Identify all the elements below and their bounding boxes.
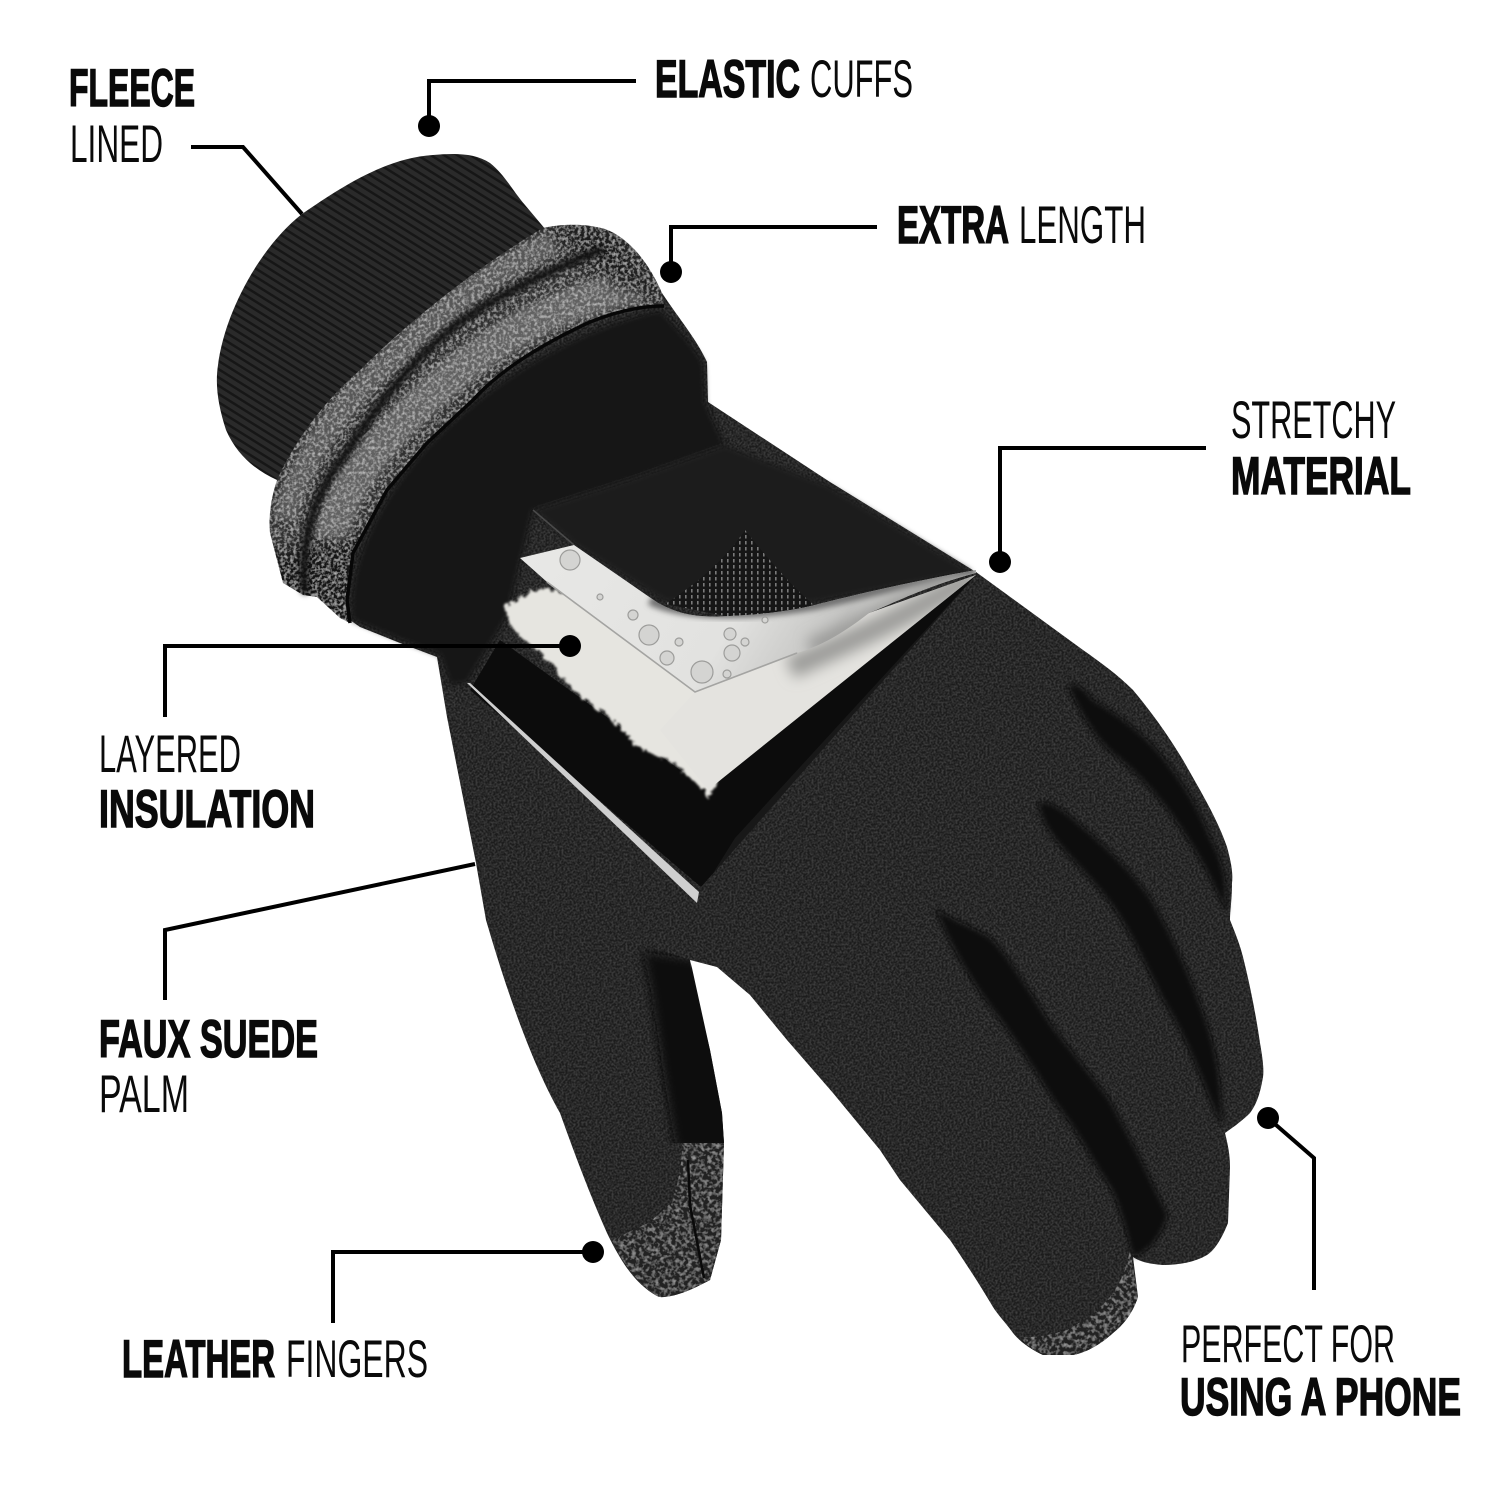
- glove: [217, 154, 1263, 1355]
- little finger shadow: [1068, 684, 1227, 913]
- label: stretchy material: MATERIAL: [1231, 447, 1411, 506]
- index fingertip leather: [1020, 1250, 1138, 1355]
- label: layered insulation: [99, 725, 315, 839]
- black inner layer: [470, 575, 976, 887]
- thumb leather fingertip: [612, 1143, 724, 1297]
- callout: leather fingers: [122, 1241, 604, 1389]
- white sliver: [467, 683, 699, 903]
- black layer outer stripe: [712, 575, 976, 875]
- sheet lower edge: [547, 582, 797, 692]
- glove body: [317, 293, 1263, 1355]
- leader line with dot: [989, 448, 1206, 573]
- inner ridge highlight: [330, 285, 640, 540]
- callout: extra length: [660, 196, 1146, 283]
- leather trim band: [269, 224, 664, 622]
- outer ridge highlight: [285, 243, 555, 520]
- water droplets: [560, 550, 768, 683]
- label: faux suede palm: [99, 1010, 318, 1124]
- label: extra length: LENGTH: [1019, 196, 1146, 255]
- layered insulation cutaway: [467, 445, 976, 903]
- label: perfect for using a phone: [1180, 1315, 1461, 1427]
- leader line with dot: [1257, 1107, 1314, 1290]
- thumb side shadow: [640, 948, 724, 1143]
- flap edge: [533, 510, 574, 545]
- label: stretchy material: [1231, 391, 1411, 506]
- touchscreen mesh layer: [665, 530, 815, 618]
- label: layered insulation: LAYERED: [99, 725, 241, 784]
- leader line: [165, 864, 475, 1000]
- label: fleece lined: [69, 59, 195, 174]
- label: fleece lined: LINED: [70, 115, 163, 174]
- callout: perfect for using a phone: [1180, 1107, 1461, 1427]
- fleece fold shadow: [790, 575, 976, 668]
- middle finger gap shadow: [935, 908, 1168, 1257]
- label: extra length: EXTRA: [897, 196, 1009, 255]
- callout: fleece lined: [69, 59, 302, 214]
- fleece insulation: [505, 575, 976, 797]
- leather band crease: [304, 250, 600, 590]
- band right shadow: [545, 225, 665, 295]
- label: faux suede palm: FAUX SUEDE: [99, 1010, 318, 1069]
- leader line with dot: [333, 1241, 604, 1323]
- label: layered insulation: INSULATION: [99, 780, 315, 839]
- dark wrist panel: [351, 310, 725, 685]
- callout: faux suede palm: [99, 864, 475, 1124]
- smooth fleece face: [660, 575, 976, 790]
- leader line with dot: [165, 635, 581, 717]
- ring finger gap shadow: [1038, 802, 1222, 1125]
- waterproof white sheet: [520, 545, 976, 692]
- thumb leather seam: [688, 1160, 704, 1278]
- fuzzy fleece: [505, 587, 735, 797]
- label: faux suede palm: PALM: [99, 1065, 189, 1124]
- label: leather fingers: FINGERS: [286, 1330, 428, 1389]
- callout: stretchy material: [989, 391, 1411, 573]
- band lower shadow: [274, 530, 361, 622]
- leader line: [191, 147, 302, 214]
- label: fleece lined: FLEECE: [69, 59, 195, 118]
- callout: elastic cuffs: [418, 50, 913, 137]
- knit elastic cuff: [217, 154, 546, 500]
- label: leather fingers: LEATHER: [122, 1330, 275, 1389]
- sheet curl shadow: [650, 570, 976, 648]
- callout: layered insulation: [99, 635, 581, 839]
- leader line with dot: [660, 227, 877, 283]
- band texture: [269, 224, 664, 622]
- outer flap: [533, 445, 972, 603]
- leather band inner edge: [347, 306, 664, 623]
- label: elastic cuffs: CUFFS: [810, 50, 913, 109]
- leader line with dot: [418, 81, 636, 137]
- label: elastic cuffs: ELASTIC: [655, 50, 800, 109]
